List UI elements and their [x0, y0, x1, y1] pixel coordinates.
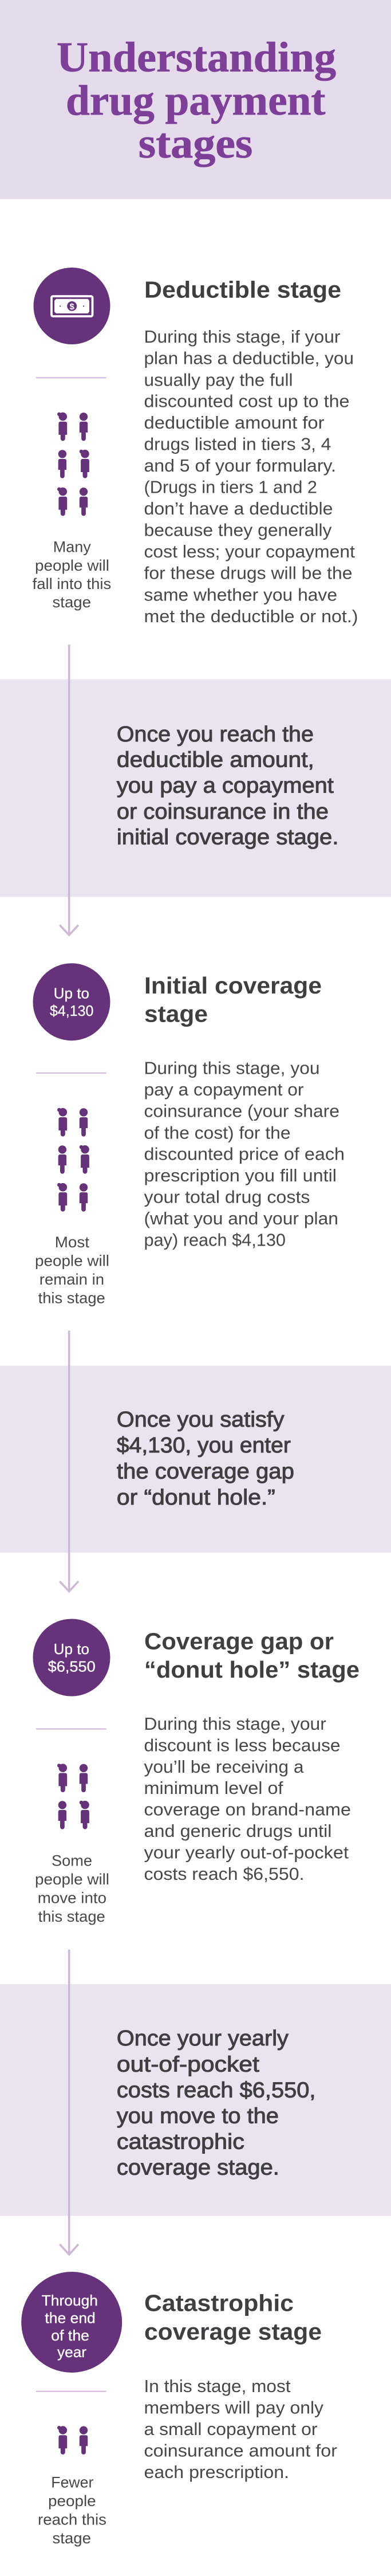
- band text: the coverage gap: [117, 1460, 294, 1484]
- band: transition to catastrophic: [0, 1984, 391, 2216]
- stage 2: initial coverage: [33, 963, 345, 1306]
- heading: “donut hole” stage: [144, 1656, 360, 1683]
- band text: Once your yearly: [117, 2027, 289, 2051]
- body text: prescription you fill until: [144, 1165, 337, 1185]
- body text: [144, 2376, 337, 2482]
- badge: up to $6,550: [33, 1619, 110, 1696]
- band text: out-of-pocket: [117, 2052, 259, 2076]
- body text: of the cost) for the: [144, 1122, 291, 1142]
- band text: or “donut hole.”: [117, 1486, 275, 1510]
- body text: members will pay only: [144, 2397, 324, 2417]
- body text: coinsurance amount for: [144, 2440, 337, 2460]
- body text: (what you and your plan: [144, 1208, 338, 1228]
- band text: coverage stage.: [117, 2156, 279, 2180]
- band text: Once you reach the: [117, 722, 314, 747]
- people icons: six people: [57, 1108, 89, 1212]
- body text: During this stage, your: [144, 1714, 326, 1734]
- caption: [33, 539, 111, 611]
- body text: cost less; your copayment: [144, 541, 355, 561]
- caption: stage: [53, 2530, 91, 2547]
- people icons: two people: [57, 2426, 88, 2455]
- body text: met the deductible or not.): [144, 606, 358, 626]
- body text: drugs listed in tiers 3, 4: [144, 434, 331, 454]
- caption: [38, 2474, 106, 2547]
- title: drug payment: [66, 77, 326, 124]
- body text: minimum level of: [144, 1778, 283, 1798]
- caption: people will: [35, 557, 109, 574]
- body text: pay a copayment or: [144, 1079, 303, 1099]
- body text: discount is less because: [144, 1735, 340, 1756]
- badge: through the end of the year: year: [57, 2343, 86, 2361]
- band text: initial coverage stage.: [117, 826, 339, 850]
- body text: because they generally: [144, 520, 332, 540]
- body text: [144, 1714, 351, 1884]
- body text: pay) reach $4,130: [144, 1230, 286, 1250]
- badge: up to $4,130: [33, 963, 110, 1040]
- caption: Fewer: [51, 2474, 93, 2491]
- divider: [36, 2391, 106, 2392]
- body text: [144, 327, 358, 626]
- band text: deductible amount,: [117, 748, 314, 772]
- band text: [117, 1408, 294, 1510]
- band text: Once you satisfy: [117, 1408, 285, 1432]
- caption: people: [48, 2492, 96, 2510]
- caption: [35, 1852, 109, 1925]
- body text: [144, 1058, 345, 1250]
- stage 3: coverage gap: [33, 1619, 360, 1925]
- band text: $4,130, you enter: [117, 1434, 291, 1458]
- caption: Many: [53, 539, 91, 556]
- icon: money badge: $: [70, 302, 75, 312]
- band text: you pay a copayment: [117, 774, 334, 798]
- badge: up to $6,550: $6,550: [48, 1658, 96, 1675]
- heading: Initial coverage: [144, 972, 322, 999]
- body text: same whether you have: [144, 584, 337, 605]
- caption: stage: [53, 594, 91, 611]
- heading: [144, 2290, 322, 2345]
- arrow 3: [60, 1950, 78, 2255]
- band text: [117, 722, 339, 850]
- body text: plan has a deductible, you: [144, 348, 354, 368]
- caption: reach this: [38, 2511, 106, 2528]
- badge: through the end of the year: the end: [45, 2309, 96, 2326]
- title: [57, 34, 336, 167]
- divider: [36, 1729, 106, 1730]
- badge: up to $4,130: Up to: [54, 985, 89, 1002]
- header panel: [0, 0, 391, 199]
- band text: catastrophic: [117, 2130, 244, 2154]
- people icons: four people: [57, 1764, 89, 1829]
- caption: Some: [52, 1852, 92, 1869]
- body text: coverage on brand-name: [144, 1800, 351, 1820]
- band text: [117, 2027, 316, 2180]
- body text: During this stage, if your: [144, 327, 340, 347]
- people icons: six people: [57, 413, 89, 516]
- badge: through the end of the year: [21, 2272, 122, 2373]
- body text: don’t have a deductible: [144, 498, 333, 519]
- badge: up to $6,550: Up to: [54, 1640, 89, 1658]
- caption: remain in: [40, 1271, 104, 1288]
- heading: Deductible stage: [144, 277, 341, 303]
- badge: through the end of the year: Through: [42, 2292, 98, 2309]
- body text: your yearly out-of-pocket: [144, 1843, 349, 1862]
- heading: [144, 972, 322, 1027]
- stage 1: deductible: [33, 268, 358, 626]
- caption: this stage: [38, 1908, 105, 1925]
- caption: Most: [55, 1234, 90, 1251]
- caption: people will: [35, 1871, 109, 1888]
- band: transition to coverage gap: [0, 1366, 391, 1553]
- stage 4: catastrophic coverage: [21, 2272, 337, 2547]
- heading: Coverage gap or: [144, 1628, 334, 1654]
- divider: [36, 377, 106, 378]
- body text: coinsurance (your share: [144, 1101, 339, 1121]
- body text: deductible amount for: [144, 413, 324, 433]
- body text: a small copayment or: [144, 2419, 317, 2439]
- arrow 2: [60, 1330, 78, 1592]
- body text: you’ll be receiving a: [144, 1757, 304, 1777]
- body text: for these drugs will be the: [144, 563, 353, 583]
- caption: this stage: [38, 1289, 105, 1306]
- heading: stage: [144, 1001, 208, 1027]
- icon: money badge: [33, 268, 110, 344]
- body text: each prescription.: [144, 2462, 289, 2482]
- badge: up to $4,130: $4,130: [50, 1002, 93, 1019]
- heading: [144, 1628, 360, 1683]
- body text: and generic drugs until: [144, 1821, 332, 1841]
- band: transition to initial coverage: [0, 680, 391, 897]
- body text: In this stage, most: [144, 2376, 291, 2396]
- body text: (Drugs in tiers 1 and 2: [144, 477, 317, 497]
- heading: coverage stage: [144, 2318, 322, 2345]
- body text: your total drug costs: [144, 1187, 310, 1207]
- band text: or coinsurance in the: [117, 800, 329, 824]
- caption: move into: [38, 1890, 106, 1907]
- band text: costs reach $6,550,: [117, 2079, 316, 2103]
- caption: people will: [35, 1252, 109, 1270]
- caption: [35, 1234, 109, 1306]
- body text: usually pay the full: [144, 370, 293, 390]
- band text: you move to the: [117, 2104, 279, 2129]
- title: Understanding: [57, 34, 336, 81]
- arrow 1: [60, 645, 78, 935]
- title: stages: [139, 120, 252, 167]
- badge: through the end of the year: of the: [51, 2327, 89, 2344]
- body text: costs reach $6,550.: [144, 1864, 305, 1884]
- body text: discounted cost up to the: [144, 391, 349, 411]
- body text: and 5 of your formulary.: [144, 455, 336, 476]
- heading: Catastrophic: [144, 2290, 294, 2316]
- caption: fall into this: [33, 575, 111, 592]
- body text: discounted price of each: [144, 1144, 345, 1164]
- body text: During this stage, you: [144, 1058, 319, 1078]
- divider: [36, 1073, 106, 1074]
